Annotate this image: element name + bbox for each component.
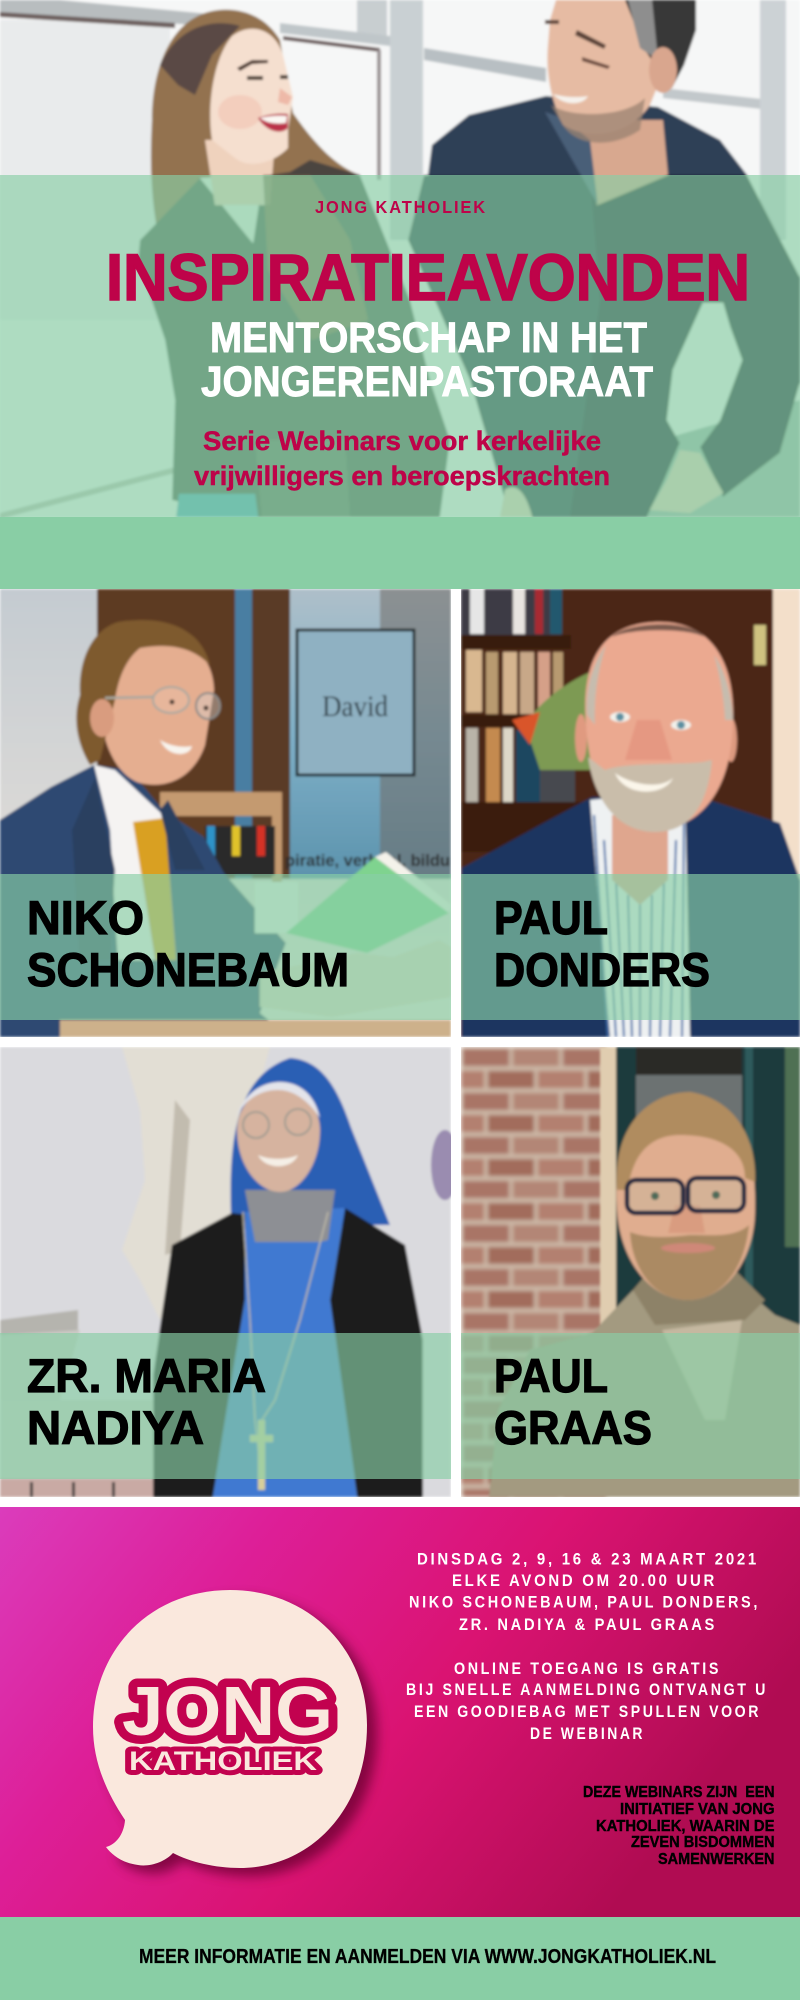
overlay band: Paul Donders xyxy=(461,874,800,1020)
intro line xyxy=(194,426,610,491)
initiative note: ZEVEN BISDOMMEN xyxy=(631,1834,774,1851)
panel: Zr. Maria Nadiya xyxy=(0,1047,459,1497)
event details: ZR. NADIYA & PAUL GRAAS xyxy=(459,1616,717,1634)
logo wordmark: JONG xyxy=(122,1672,333,1750)
photo: Niko: piratie, verhaal, bildu xyxy=(285,851,450,870)
photo: Paul Donders xyxy=(461,589,800,1037)
initiative note: KATHOLIEK, WAARIN DE xyxy=(596,1818,774,1835)
panel: Paul Graas xyxy=(461,1047,800,1497)
name: Paul Graas: PAUL xyxy=(494,1350,608,1403)
photo: Niko: David xyxy=(322,690,388,723)
young woman figure xyxy=(138,10,450,517)
initiative note: INITIATIEF VAN JONG xyxy=(620,1801,774,1818)
name: Paul Graas xyxy=(494,1350,652,1455)
footer bar xyxy=(0,1917,800,2000)
mentor figure xyxy=(408,0,800,517)
initiative note: DEZE WEBINARS ZIJN EEN xyxy=(583,1784,774,1801)
name: Paul Donders: PAUL xyxy=(494,892,608,945)
name: Paul Graas: GRAAS xyxy=(494,1402,652,1455)
hero green overlay band xyxy=(0,175,800,517)
name: Zr. Maria Nadiya: ZR. MARIA xyxy=(27,1350,266,1403)
photo: Zr. Maria xyxy=(0,1047,459,1497)
initiative note: SAMENWERKEN xyxy=(658,1851,774,1868)
panel: Paul Donders xyxy=(461,589,800,1037)
subtitle: JONGERENPASTORAAT xyxy=(201,359,653,406)
panel: pink information block xyxy=(0,1507,800,1917)
name: Paul Donders xyxy=(494,892,710,997)
event details: ONLINE TOEGANG IS GRATIS xyxy=(454,1660,721,1678)
logo wordmark: KATHOLIEK xyxy=(129,1746,318,1776)
overlay band: Niko xyxy=(0,874,451,1020)
name: Zr. Maria Nadiya: NADIYA xyxy=(27,1402,204,1455)
intro line: vrijwilligers en beroepskrachten xyxy=(194,461,610,491)
floor at lower right xyxy=(640,400,800,517)
name: Zr. Maria Nadiya xyxy=(27,1350,266,1455)
subtitle: MENTORSCHAP IN HET xyxy=(210,315,647,362)
name: Niko Schonebaum: SCHONEBAUM xyxy=(27,944,349,997)
event details: DE WEBINAR xyxy=(530,1725,645,1743)
event details: DINSDAG 2, 9, 16 & 23 MAART 2021 xyxy=(417,1550,759,1568)
event details: ELKE AVOND OM 20.00 UUR xyxy=(452,1572,717,1590)
event details: NIKO SCHONEBAUM, PAUL DONDERS, xyxy=(409,1594,760,1612)
photo: Paul Graas xyxy=(461,1047,800,1497)
green spacer strip xyxy=(0,517,800,589)
overlay band: Paul Graas xyxy=(461,1333,800,1479)
subtitle xyxy=(201,315,653,406)
photo: Niko xyxy=(0,589,451,1037)
name: Niko Schonebaum xyxy=(27,892,349,997)
overlay band: Zr. Maria xyxy=(0,1333,451,1479)
logo speech bubble xyxy=(93,1590,377,1876)
hero photo: mentor and young woman at a window xyxy=(0,0,800,519)
intro line: Serie Webinars voor kerkelijke xyxy=(203,426,601,456)
panel: Niko Schonebaum xyxy=(0,589,451,1037)
eyebrow: Jong Katholiek: JONG KATHOLIEK xyxy=(315,197,487,217)
name: Paul Donders: DONDERS xyxy=(494,944,710,997)
footer call to action: MEER INFORMATIE EN AANMELDEN VIA WWW.JONGKATHOLIEK.NL xyxy=(139,1946,716,1968)
name: Niko Schonebaum: NIKO xyxy=(27,892,144,945)
initiative note xyxy=(583,1784,774,1868)
event details xyxy=(406,1550,768,1743)
title: INSPIRATIEAVONDEN xyxy=(106,240,750,314)
